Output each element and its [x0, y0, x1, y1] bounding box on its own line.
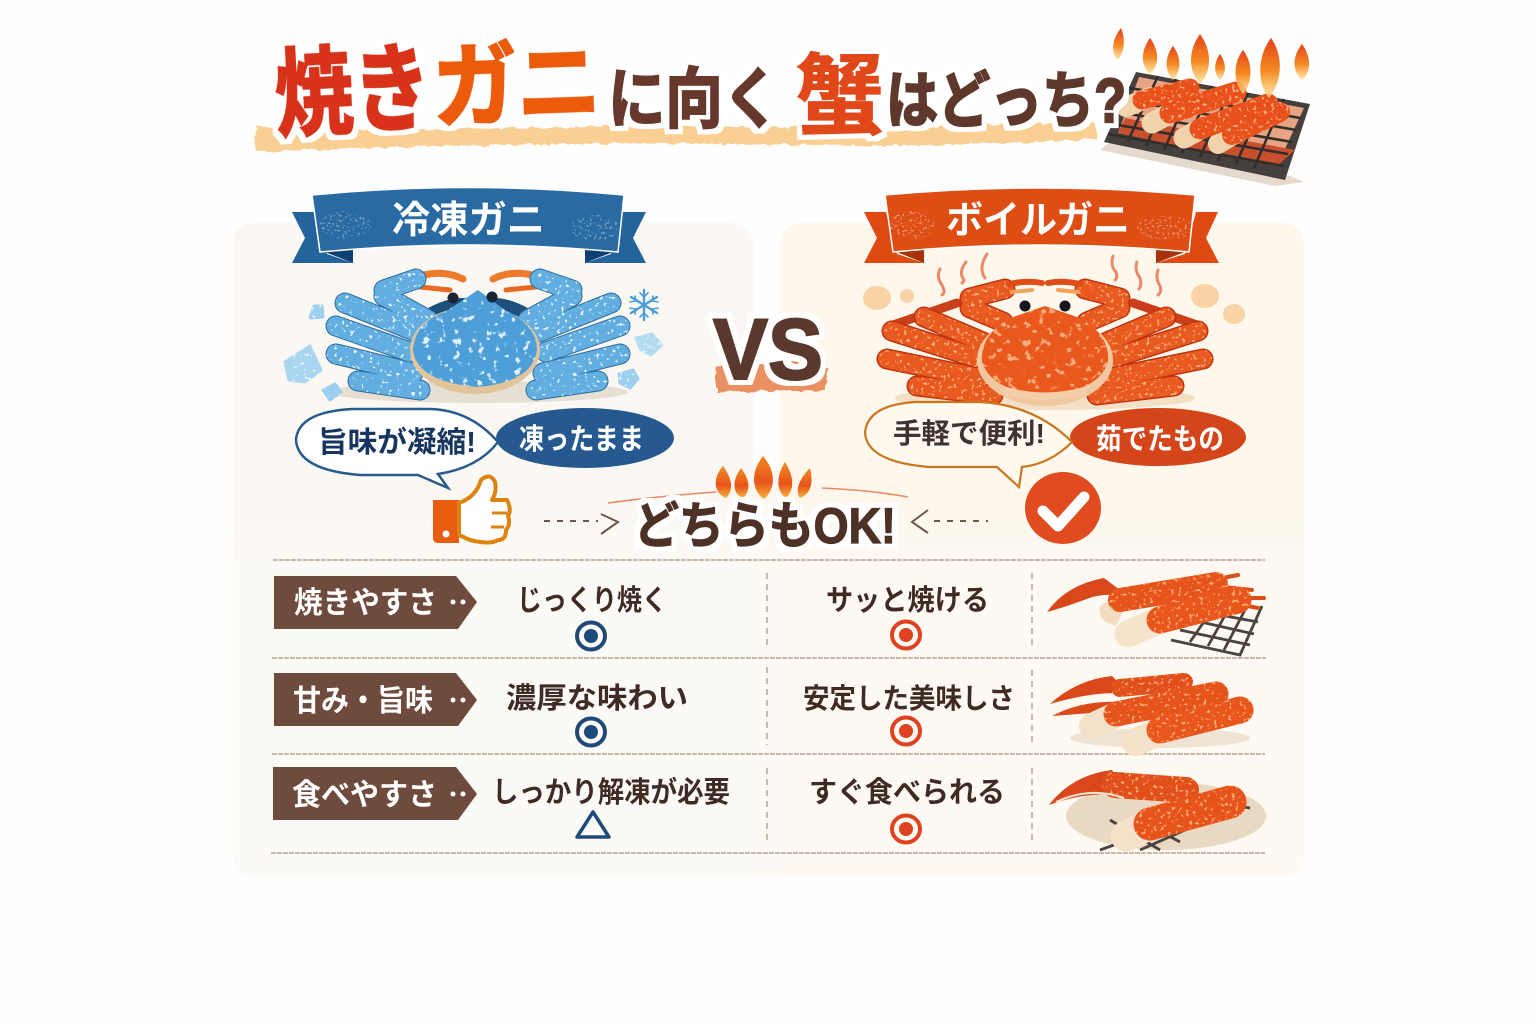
- panel: frozen crab background: [233, 223, 790, 877]
- icon: flames above OK: [716, 456, 812, 499]
- rating: double circle navy: [577, 622, 605, 650]
- banner: 冷凍ガニ: [292, 188, 646, 263]
- row label: 焼きやすさ: [274, 576, 477, 629]
- illustration: claws, row 2: [1050, 676, 1250, 748]
- illustration: claws on plate, row 3: [1049, 770, 1266, 850]
- row label: 甘み・旨味: [274, 673, 477, 726]
- panel: lower comparison backdrop: [753, 470, 783, 877]
- pill: 凍ったまま: [496, 408, 674, 468]
- speech bubble: 手軽で便利!: [865, 402, 1072, 487]
- cell text: 濃厚な味わい: 濃厚な味わい: [506, 682, 688, 715]
- title brush stroke: [254, 123, 1098, 152]
- pill: 茹でたもの: [1070, 408, 1246, 466]
- icons: ice cubes and snowflake: [285, 290, 662, 400]
- decorative arcs around heading: [608, 488, 908, 503]
- cell text: サッと焼ける: サッと焼ける: [826, 584, 989, 617]
- rating: double circle red: [892, 816, 920, 842]
- row label: 焼きやすさ: 焼きやすさ: [294, 587, 437, 620]
- row label: 甘み・旨味: 甘み・旨味: [293, 685, 433, 718]
- illustration: claws on grill, row 1: [1047, 575, 1264, 655]
- banner: ボイルガニ: [864, 188, 1219, 263]
- illustration: frozen blue crab: [328, 273, 628, 403]
- panel: table lightening: [233, 500, 1304, 877]
- heading: どちらもOK!: どちらもOK!: [634, 498, 896, 554]
- speech bubble: 旨味が凝縮!: 旨味が凝縮!: [318, 425, 476, 459]
- speech bubble: 手軽で便利!: 手軽で便利!: [893, 418, 1045, 449]
- cell text: すぐ食べられる: すぐ食べられる: [809, 776, 1005, 809]
- rating: double circle red: [892, 622, 920, 648]
- speech bubble: 旨味が凝縮!: [296, 409, 498, 488]
- row label: 食べやすさ: 食べやすさ: [292, 779, 437, 812]
- VS mark: VS: [713, 302, 823, 398]
- cell text: 安定した美味しさ: 安定した美味しさ: [803, 683, 1015, 714]
- illustration: boiled red crab: [887, 282, 1203, 410]
- arrow: right dashed pointer: [912, 510, 988, 533]
- title: に向く: に向く: [608, 62, 780, 136]
- cell text: しっかり解凍が必要: しっかり解凍が必要: [492, 775, 730, 809]
- title: ガニ: ガニ: [431, 32, 603, 140]
- rating: double circle red: [892, 718, 920, 744]
- icon: thumbs up: [433, 476, 510, 543]
- pill: 凍ったまま: 凍ったまま: [519, 423, 644, 456]
- rating: triangle navy: [577, 812, 609, 837]
- cell text: じっくり焼く: じっくり焼く: [517, 584, 667, 617]
- row label: 食べやすさ: [273, 767, 477, 820]
- icons: steam and puffs: [863, 254, 1245, 324]
- title: [272, 32, 1126, 150]
- title: 蟹: 蟹: [796, 47, 884, 146]
- pill: 茹でたもの: 茹でたもの: [1096, 423, 1224, 456]
- title: はどっち?: はどっち?: [886, 67, 1126, 136]
- arrow: left dashed pointer: [544, 514, 618, 534]
- rating: double circle navy: [577, 718, 605, 746]
- comparison table: [271, 560, 1266, 853]
- banner: ボイルガニ: ボイルガニ: [946, 200, 1130, 242]
- panel: boiled crab background: [768, 223, 1304, 877]
- icon: grill with crab legs and flames: [1100, 28, 1310, 186]
- banner: 冷凍ガニ: 冷凍ガニ: [392, 200, 545, 242]
- icon: check mark: [1025, 472, 1101, 544]
- title: 焼き: 焼き: [272, 35, 434, 150]
